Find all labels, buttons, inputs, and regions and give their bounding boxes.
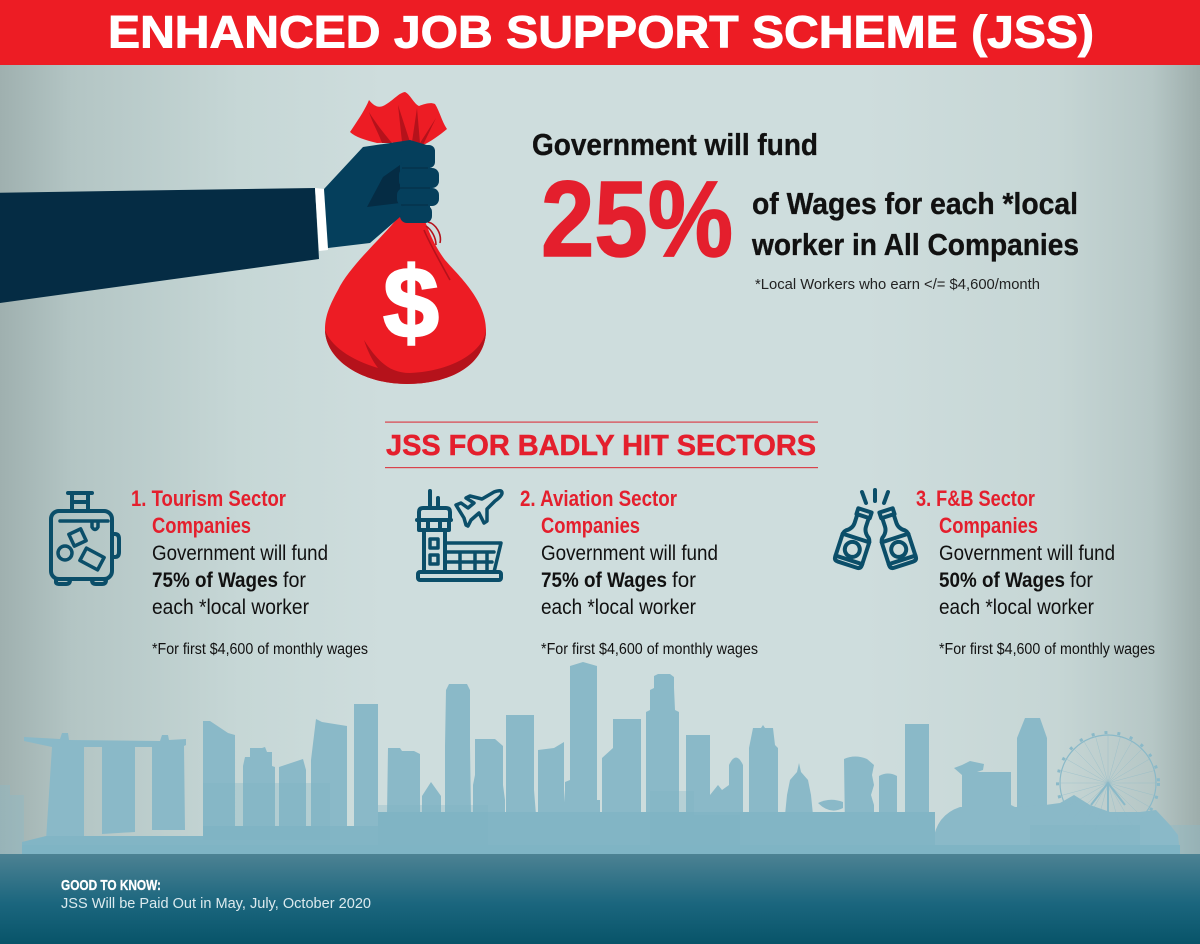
text: tourism sector: Government will fund — [152, 541, 328, 565]
title banner — [0, 0, 1200, 65]
text: aviation sector: for — [672, 568, 696, 592]
headline: government funds 25%: of Wages for each *local — [752, 186, 1078, 221]
icon: airport tower and plane — [417, 491, 502, 580]
illustration: hand holding money bag: $ — [383, 247, 439, 359]
headline: government funds 25%: 25% — [541, 158, 733, 279]
text: aviation sector: Government will fund — [541, 541, 718, 565]
text: tourism sector: each *local worker — [152, 595, 309, 619]
text: aviation sector — [520, 486, 758, 658]
text: aviation sector: *For first $4,600 of monthly wages — [541, 641, 758, 658]
text: aviation sector: 75% of Wages — [541, 568, 667, 592]
text: tourism sector: 75% of Wages — [152, 568, 278, 592]
icon: clinking bottles — [834, 490, 917, 569]
text: F&B sector — [916, 486, 1155, 658]
headline: government funds 25%: worker in All Companies — [751, 227, 1079, 262]
title banner: ENHANCED JOB SUPPORT SCHEME (JSS) — [108, 6, 1094, 58]
text: F&B sector: *For first $4,600 of monthly wages — [939, 641, 1155, 658]
headline: government funds 25% — [532, 127, 1079, 293]
text: F&B sector: each *local worker — [939, 595, 1094, 619]
headline: government funds 25%: Government will fund — [532, 127, 818, 162]
footer: good to know: GOOD TO KNOW: — [61, 877, 161, 894]
text: aviation sector: 2. Aviation Sector — [520, 486, 677, 511]
text: tourism sector: for — [283, 568, 306, 592]
text: F&B sector: 50% of Wages — [939, 568, 1065, 592]
text: tourism sector — [131, 486, 368, 658]
text: F&B sector: Companies — [939, 513, 1038, 538]
section heading: badly hit sectors: JSS FOR BADLY HIT SECTORS — [386, 430, 816, 462]
icon: suitcase — [51, 493, 119, 584]
footer: good to know — [0, 854, 1200, 944]
text: tourism sector: Companies — [152, 513, 251, 538]
text: F&B sector: Government will fund — [939, 541, 1115, 565]
illustration: hand holding money bag — [0, 92, 486, 384]
text: tourism sector: *For first $4,600 of monthly wages — [152, 641, 368, 658]
text: aviation sector: Companies — [541, 513, 640, 538]
text: aviation sector: each *local worker — [541, 595, 696, 619]
skyline of Singapore — [0, 662, 1200, 855]
text: tourism sector: 1. Tourism Sector — [131, 486, 286, 511]
text: F&B sector: 3. F&B Sector — [916, 486, 1035, 511]
headline: government funds 25%: *Local Workers who earn </= $4,600/month — [755, 277, 1040, 293]
text: F&B sector: for — [1070, 568, 1093, 592]
footer: good to know: JSS Will be Paid Out in May, July, October 2020 — [61, 895, 371, 912]
